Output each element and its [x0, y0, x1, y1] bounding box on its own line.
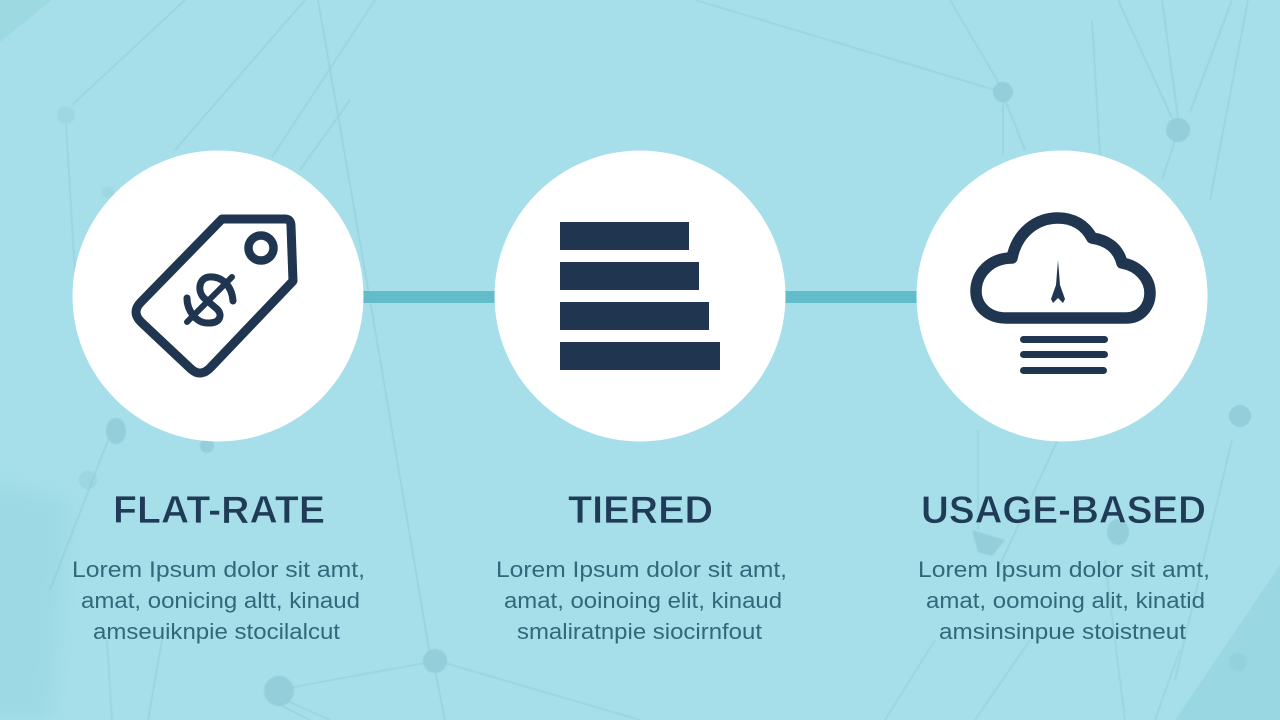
- heading: flat-rate: FLAT-RATE: [113, 489, 325, 532]
- description: usage-based: amat, oomoing alit, kinatid: [926, 588, 1205, 613]
- circle: flat-rate: [72, 150, 364, 442]
- icon: cloud with gauge: [976, 218, 1150, 374]
- heading: usage-based: USAGE-BASED: [921, 489, 1206, 532]
- description: flat-rate: [72, 557, 365, 644]
- description: flat-rate: Lorem Ipsum dolor sit amt,: [72, 557, 365, 582]
- circle: tiered: [494, 150, 786, 442]
- description: tiered: smaliratnpie siocirnfout: [517, 619, 763, 644]
- connector: tiered to usage-based: [776, 291, 926, 303]
- icon: stacked tiers: [560, 222, 720, 370]
- icon: price tag: [136, 219, 293, 373]
- circle: usage-based: [916, 150, 1208, 442]
- gauge needle: [1051, 260, 1065, 303]
- description: usage-based: [918, 557, 1210, 644]
- description: tiered: [496, 557, 787, 644]
- column: tiered: [494, 150, 787, 644]
- description: tiered: amat, ooinoing elit, kinaud: [504, 588, 782, 613]
- column: flat-rate: [72, 150, 365, 644]
- connector: flat-rate to tiered: [355, 291, 505, 303]
- usage lines: [1020, 336, 1108, 374]
- description: flat-rate: amat, oonicing altt, kinaud: [81, 588, 360, 613]
- description: tiered: Lorem Ipsum dolor sit amt,: [496, 557, 787, 582]
- heading: tiered: TIERED: [568, 489, 713, 532]
- description: flat-rate: amseuiknpie stocilalcut: [93, 619, 341, 644]
- description: usage-based: Lorem Ipsum dolor sit amt,: [918, 557, 1210, 582]
- description: usage-based: amsinsinpue stoistneut: [939, 619, 1187, 644]
- column: usage-based: [916, 150, 1210, 644]
